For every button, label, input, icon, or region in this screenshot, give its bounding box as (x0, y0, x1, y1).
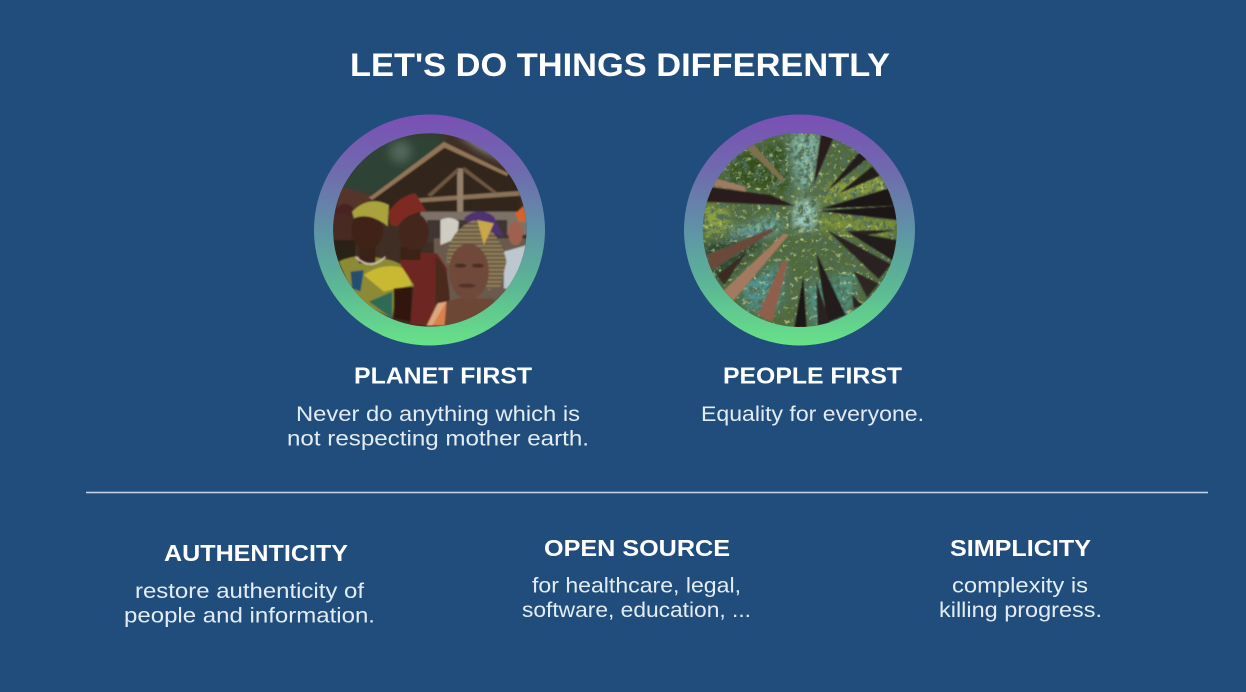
icon: gradient ring right (684, 114, 915, 346)
background right figures (504, 245, 527, 292)
text: open source description: for healthcare, legal, (532, 574, 741, 598)
text: open source description: software, education, ... (522, 599, 751, 622)
text: authenticity description (124, 580, 375, 628)
panel: people first (684, 114, 924, 426)
dark trunks (705, 187, 794, 206)
heading: simplicity: SIMPLICITY (950, 535, 1091, 561)
text: planet first description: Never do anything which is (296, 403, 580, 426)
text: authenticity description: people and information. (124, 604, 375, 628)
panel: open source (522, 535, 751, 622)
text: simplicity description: killing progress. (939, 599, 1102, 622)
heading: planet first: PLANET FIRST (354, 362, 532, 388)
text: simplicity description (939, 574, 1102, 622)
reddish-brown trunks (723, 233, 789, 301)
text: planet first description (287, 403, 589, 450)
text: open source description (522, 574, 751, 622)
text: authenticity description: restore authenticity of (135, 580, 364, 603)
photo: redwood canopy from below (700, 132, 900, 332)
heading: open source: OPEN SOURCE (544, 535, 730, 561)
title: LET'S DO THINGS DIFFERENTLY (350, 47, 890, 83)
front woman (432, 298, 494, 326)
heading: authenticity: AUTHENTICITY (164, 540, 348, 566)
yellow dress woman (339, 256, 414, 318)
panel: authenticity (124, 540, 375, 628)
far left woman (333, 214, 352, 240)
photo: women in a village crowd (330, 132, 530, 332)
icon: gradient ring left (314, 114, 545, 346)
panel: simplicity (939, 535, 1102, 622)
red dress woman (400, 252, 449, 325)
text: people first description: Equality for everyone. (701, 403, 924, 426)
heading: people first: PEOPLE FIRST (723, 362, 902, 388)
text: planet first description: not respecting mother earth. (287, 428, 589, 450)
text: simplicity description: complexity is (952, 574, 1088, 598)
panel: planet first (287, 114, 589, 450)
